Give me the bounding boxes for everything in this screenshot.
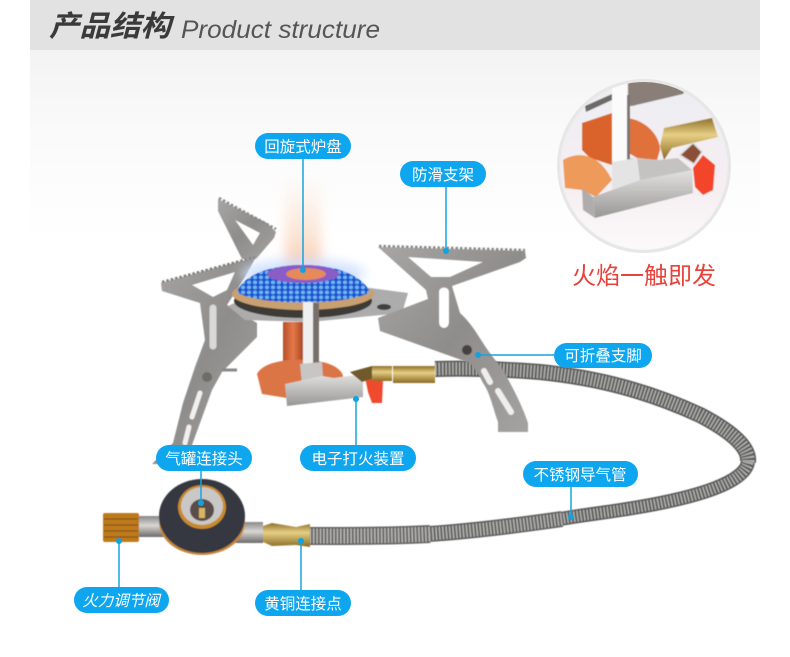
leg pivot: [462, 345, 472, 355]
valve core: [190, 499, 214, 521]
valve pin: [199, 508, 205, 518]
tray rivet: [377, 304, 391, 310]
igniter bracket: [612, 158, 640, 190]
inset ring: [557, 79, 731, 253]
title: english: Product structure: [181, 16, 380, 44]
inset photo: [560, 80, 728, 250]
top plate right: [628, 82, 684, 106]
burner tray: [228, 288, 408, 322]
leg slots: [185, 393, 200, 443]
screw thread: [627, 95, 630, 160]
small foot tab: [222, 368, 237, 372]
vertical slot: [210, 308, 216, 346]
label: anti-slip support: [400, 161, 486, 254]
orange inner ring: [178, 485, 226, 529]
label: anti-slip support: 防滑支架: [412, 166, 474, 184]
label: electronic igniter: [300, 396, 416, 471]
copper stem: [283, 322, 303, 370]
hose upper run: [435, 369, 748, 462]
label: folding legs: 可折叠支脚: [564, 347, 642, 365]
silver igniter block: [593, 170, 693, 218]
label: flow valve: [74, 538, 169, 613]
brass fitting: [263, 523, 310, 547]
header band: [30, 0, 760, 50]
burner rim: [232, 278, 374, 310]
steel pipe right: [232, 522, 263, 543]
gas hose: [308, 369, 748, 536]
electrode cap: [680, 143, 702, 164]
label: burner: [255, 133, 351, 273]
regulator: [103, 479, 310, 555]
copper stem: [582, 113, 612, 165]
brass nozzle: [660, 118, 718, 160]
back pot support: [218, 198, 276, 259]
top plate left: [585, 94, 612, 112]
steel pipe left: [139, 516, 169, 537]
label: stainless hose: [523, 461, 638, 520]
dark disc: [159, 479, 245, 553]
hose middle run: [428, 519, 562, 534]
knob knurling: [104, 519, 138, 537]
burner top: [267, 265, 339, 283]
label: brass joint: [255, 538, 351, 616]
right pot support and leg: [378, 246, 528, 432]
orange rim: [159, 489, 245, 555]
igniter body: [285, 374, 363, 406]
stove: [152, 175, 528, 464]
knurled wheel: [563, 155, 612, 197]
igniter bracket: [300, 362, 323, 384]
brass hose connector: [350, 366, 435, 383]
label: canister connector: 气罐连接头: [165, 450, 243, 468]
title: chinese: 产品结构: [49, 11, 175, 43]
orange disc: [627, 118, 660, 160]
label: canister connector: [156, 445, 252, 506]
slogan: 火焰一触即发: [572, 263, 716, 290]
white post: [612, 80, 627, 162]
igniter screw: [313, 303, 319, 363]
label: electronic igniter: 电子打火装置: [311, 450, 405, 468]
label: folding legs: [475, 343, 652, 368]
burner centre flare: [286, 268, 326, 280]
burner ring: [234, 284, 372, 318]
white igniter post: [303, 302, 313, 364]
flow knob: [103, 513, 139, 542]
inset: igniter close-up: [557, 79, 731, 253]
silver valve seat: [181, 487, 223, 525]
soft photo backdrop: [30, 50, 760, 240]
label: stainless hose: 不锈钢导气管: [533, 466, 627, 484]
hose lower run: [560, 462, 748, 519]
steel back wall: [630, 158, 692, 182]
label: brass joint: 黄铜连接点: [264, 595, 342, 613]
red button: [693, 155, 715, 195]
leg slots: [484, 371, 511, 412]
hose connector run: [308, 534, 430, 536]
left pot support and leg: [152, 257, 257, 464]
label: flow valve: 火力调节阀: [82, 592, 162, 610]
red ignition button: [365, 372, 383, 403]
label: burner: 回旋式炉盘: [264, 137, 342, 156]
flame halo: [241, 260, 365, 288]
flame glow: [285, 175, 321, 275]
leg hinge: [202, 372, 212, 382]
burner gas dots: [237, 265, 370, 302]
orange adjustment disc: [257, 360, 343, 398]
block end face: [582, 188, 595, 218]
